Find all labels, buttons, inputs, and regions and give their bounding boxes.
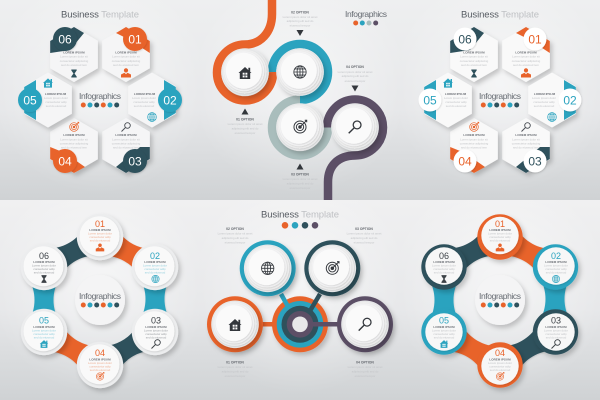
hexagon 03: Lorem ipsum dolor sit bbox=[112, 138, 140, 142]
hexagon 05: LOREM IPSUM bbox=[445, 92, 467, 96]
heading: Business Template bbox=[61, 10, 139, 20]
panel: hub and spoke with four options bbox=[200, 200, 400, 400]
panel: circle ring with white discs bbox=[0, 200, 200, 400]
node 02 bbox=[533, 244, 578, 290]
hexagon 06 bbox=[450, 27, 498, 82]
option 02 text: Lorem ipsum dolor sit amet bbox=[283, 15, 318, 19]
center label: Infographics bbox=[479, 91, 521, 101]
hexagon 03: LOREM IPSUM bbox=[115, 133, 137, 137]
option 02 text: eiusmod tempor bbox=[225, 240, 245, 244]
hexagon 06: 06 bbox=[458, 32, 472, 46]
hexagon 04: sed do eiusmod tem bbox=[61, 146, 88, 150]
option 03 text: eiusmod tempor bbox=[290, 186, 310, 190]
option 02 text bbox=[218, 227, 253, 244]
heading: Business Template bbox=[461, 10, 539, 20]
disc 03: Lorem ipsum dolor bbox=[144, 328, 168, 332]
option 04 text: 04 OPTION bbox=[356, 360, 374, 364]
disc 01 bbox=[77, 214, 123, 260]
node: home bbox=[221, 48, 269, 96]
node 04 bbox=[477, 342, 523, 388]
title and legend: Infographics bbox=[345, 9, 387, 19]
node 06: Lorem ipsum dolor bbox=[432, 264, 456, 268]
arrow: 03 bbox=[296, 164, 304, 170]
disc 01: Lorem ipsum dolor bbox=[88, 232, 112, 236]
hexagon 02: consectetur adip bbox=[533, 100, 555, 104]
node 05: sed do eiusmod bbox=[434, 336, 455, 340]
node 02: globe bbox=[240, 240, 296, 296]
hexagon 01: consectetur adipiscing bbox=[112, 59, 141, 63]
node 02: 02 bbox=[551, 251, 561, 261]
path: grey-green segment bbox=[272, 100, 328, 156]
disc 04: sed do eiusmod bbox=[90, 368, 111, 372]
hexagon 06: consectetur adipiscing bbox=[60, 59, 89, 63]
hexagon 03: Lorem ipsum dolor sit bbox=[512, 138, 540, 142]
hexagon 02: sed do eiusmod bbox=[534, 104, 555, 108]
hexagon 05 bbox=[18, 72, 72, 128]
hexagon 01: Lorem ipsum dolor sit bbox=[112, 54, 140, 58]
node 06: consectetur adip bbox=[433, 267, 455, 271]
node 05: consectetur adip bbox=[433, 332, 455, 336]
disc 06: sed do eiusmod bbox=[34, 270, 55, 274]
disc 01: 01 bbox=[95, 219, 105, 229]
option 03 text bbox=[283, 172, 318, 190]
disc 06: consectetur adip bbox=[33, 267, 55, 271]
hexagon 02: Lorem ipsum dolor bbox=[132, 96, 156, 100]
node 04: Lorem ipsum dolor bbox=[488, 361, 512, 365]
arrow: 04 bbox=[352, 86, 358, 92]
option 04 text: adipiscing elit sed do bbox=[352, 370, 379, 374]
hexagon 04: LOREM IPSUM bbox=[63, 133, 85, 137]
hexagon 02: 02 bbox=[163, 93, 177, 107]
node: target bbox=[276, 103, 324, 151]
hexagon 06: Lorem ipsum dolor sit bbox=[460, 54, 488, 58]
node: magnifier bbox=[331, 103, 379, 151]
node 03 bbox=[533, 309, 578, 355]
title and legend bbox=[345, 9, 387, 26]
hexagon 01: sed do eiusmod tem bbox=[113, 63, 140, 67]
option 04 text: eiusmod tempor bbox=[345, 79, 365, 83]
option 02 text: adipiscing elit sed do bbox=[287, 19, 314, 23]
disc 04: LOREM IPSUM bbox=[89, 358, 111, 362]
node 01 bbox=[477, 214, 523, 260]
hexagon 01: LOREM IPSUM bbox=[515, 50, 537, 54]
hexagon 05: 05 bbox=[23, 93, 37, 107]
hexagon 05: consectetur adip bbox=[445, 100, 467, 104]
hub rings and spokes bbox=[255, 294, 345, 352]
option 04 text: eiusmod tempor bbox=[355, 374, 375, 378]
option 03 text: Lorem ipsum dolor sit amet bbox=[283, 177, 318, 181]
disc 05: Lorem ipsum dolor bbox=[32, 328, 56, 332]
hexagon 02: Lorem ipsum dolor bbox=[532, 96, 556, 100]
hexagon 04: Lorem ipsum dolor sit bbox=[460, 138, 488, 142]
node 02: LOREM IPSUM bbox=[545, 260, 567, 264]
disc 02: consectetur adip bbox=[144, 267, 166, 271]
node 04: LOREM IPSUM bbox=[489, 358, 511, 362]
node 05: 05 bbox=[439, 316, 449, 326]
option 02 text: 02 OPTION bbox=[226, 227, 244, 231]
option 04 text bbox=[338, 65, 373, 83]
hexagon 06: 06 bbox=[58, 32, 72, 46]
disc 06: LOREM IPSUM bbox=[33, 260, 55, 264]
disc 03: sed do eiusmod bbox=[146, 336, 167, 340]
hexagon 01: 01 bbox=[128, 32, 142, 46]
hexagon 02: LOREM IPSUM bbox=[134, 92, 156, 96]
hexagon 02: LOREM IPSUM bbox=[534, 92, 556, 96]
hexagon 05: Lorem ipsum dolor bbox=[444, 96, 468, 100]
option 03 text: eiusmod tempor bbox=[354, 240, 374, 244]
hexagon 04 bbox=[450, 118, 498, 173]
option 01 text: Lorem ipsum dolor sit amet bbox=[228, 122, 263, 126]
node 06: sed do eiusmod bbox=[434, 270, 455, 274]
node 05: LOREM IPSUM bbox=[433, 325, 455, 329]
node: globe bbox=[276, 48, 324, 96]
option 04 text: Lorem ipsum dolor sit amet bbox=[348, 365, 383, 369]
node 03: LOREM IPSUM bbox=[545, 325, 567, 329]
node 03: 03 bbox=[551, 316, 561, 326]
disc 01: LOREM IPSUM bbox=[89, 228, 111, 232]
hexagon 04: 04 bbox=[458, 154, 472, 168]
hexagon 03: sed do eiusmod tem bbox=[513, 146, 540, 150]
option 01 text bbox=[218, 360, 253, 378]
disc 05: consectetur adip bbox=[33, 332, 55, 336]
hexagon 05: 05 bbox=[423, 93, 437, 107]
arrow: 02 bbox=[296, 30, 304, 36]
hexagon 05: sed do eiusmod bbox=[446, 104, 467, 108]
disc 05: LOREM IPSUM bbox=[33, 325, 55, 329]
connectors ring bbox=[28, 228, 170, 373]
node 03: Lorem ipsum dolor bbox=[544, 328, 568, 332]
hexagon 05 bbox=[418, 72, 472, 128]
option 04 text: 04 OPTION bbox=[346, 65, 364, 69]
hexagon 05: sed do eiusmod bbox=[46, 104, 67, 108]
hexagon 06: consectetur adipiscing bbox=[460, 59, 489, 63]
hexagon 02: 02 bbox=[563, 93, 577, 107]
node 03: consectetur adip bbox=[545, 332, 567, 336]
node 04: magnifier bbox=[337, 296, 393, 352]
disc 02 bbox=[132, 244, 178, 290]
node 02: Lorem ipsum dolor bbox=[544, 264, 568, 268]
disc 06: Lorem ipsum dolor bbox=[32, 264, 56, 268]
node 01: LOREM IPSUM bbox=[489, 228, 511, 232]
hexagon 02 bbox=[528, 72, 582, 128]
hexagon 04: consectetur adipiscing bbox=[60, 142, 89, 146]
disc 02: Lorem ipsum dolor bbox=[143, 264, 167, 268]
node 01: sed do eiusmod bbox=[490, 238, 511, 242]
hexagon 01 bbox=[102, 27, 150, 82]
disc 05: sed do eiusmod bbox=[34, 336, 55, 340]
center label bbox=[479, 91, 521, 108]
hexagon 01: Lorem ipsum dolor sit bbox=[512, 54, 540, 58]
disc 04: Lorem ipsum dolor bbox=[88, 361, 112, 365]
hexagon 04: Lorem ipsum dolor sit bbox=[60, 138, 88, 142]
option 04 text bbox=[348, 360, 383, 378]
center label: Infographics bbox=[79, 91, 121, 101]
option 02 text: adipiscing elit sed do bbox=[222, 236, 249, 240]
disc 04: consectetur adip bbox=[89, 364, 111, 368]
option 01 text: eiusmod tempor bbox=[235, 131, 255, 135]
hexagon 01: sed do eiusmod tem bbox=[513, 63, 540, 67]
hexagon 03: 03 bbox=[128, 154, 142, 168]
hexagon 04 bbox=[50, 118, 98, 173]
hexagon 03: consectetur adipiscing bbox=[512, 142, 541, 146]
option 01 text bbox=[228, 118, 263, 135]
panel: circle ring with coloured rims bbox=[400, 200, 600, 400]
path: teal segment bbox=[272, 44, 328, 100]
disc 04 bbox=[77, 342, 123, 388]
option 02 text bbox=[283, 10, 318, 28]
node 04: consectetur adip bbox=[489, 364, 511, 368]
disc 03: 03 bbox=[151, 316, 161, 326]
disc 06: 06 bbox=[39, 251, 49, 261]
node 03: target bbox=[304, 240, 360, 296]
disc 03 bbox=[132, 309, 178, 355]
hexagon 05: Lorem ipsum dolor bbox=[44, 96, 68, 100]
center circle bbox=[475, 275, 525, 325]
hexagon 02 bbox=[128, 72, 182, 128]
connectors ring bbox=[428, 228, 570, 373]
disc 02: LOREM IPSUM bbox=[144, 260, 166, 264]
panel: hexagon infographic, white badges bbox=[400, 0, 600, 200]
option 01 text: Lorem ipsum dolor sit amet bbox=[218, 365, 253, 369]
node 03: sed do eiusmod bbox=[546, 336, 567, 340]
panel: winding path with four options bbox=[200, 0, 400, 200]
hexagon 01: LOREM IPSUM bbox=[115, 50, 137, 54]
disc 02: sed do eiusmod bbox=[145, 270, 166, 274]
node 06 bbox=[421, 244, 467, 290]
option 02 text: 02 OPTION bbox=[291, 10, 309, 14]
hexagon 03 bbox=[102, 118, 150, 173]
hexagon 06: Lorem ipsum dolor sit bbox=[60, 54, 88, 58]
hexagon 03 bbox=[502, 118, 550, 173]
disc 02: 02 bbox=[150, 251, 160, 261]
hexagon 03: LOREM IPSUM bbox=[515, 133, 537, 137]
node 01: Lorem ipsum dolor bbox=[488, 232, 512, 236]
hexagon 04: consectetur adipiscing bbox=[460, 142, 489, 146]
option 03 text: adipiscing elit sed do bbox=[287, 182, 314, 186]
hexagon 04: 04 bbox=[58, 154, 72, 168]
path: orange segment bbox=[217, 0, 273, 101]
option 01 text: adipiscing elit sed do bbox=[222, 370, 249, 374]
hexagon 02: sed do eiusmod bbox=[134, 104, 155, 108]
hexagon 06 bbox=[50, 27, 98, 82]
option 04 text: adipiscing elit sed do bbox=[342, 74, 369, 78]
center circle bbox=[75, 275, 125, 325]
disc 04: 04 bbox=[95, 348, 105, 358]
option 01 text: 01 OPTION bbox=[236, 118, 254, 122]
option 03 text: adipiscing elit sed do bbox=[351, 236, 378, 240]
option 04 text: Lorem ipsum dolor sit amet bbox=[338, 70, 373, 74]
node 06: LOREM IPSUM bbox=[433, 260, 455, 264]
option 01 text: 01 OPTION bbox=[226, 360, 244, 364]
disc 03: consectetur adip bbox=[145, 332, 167, 336]
hexagon 06: sed do eiusmod tem bbox=[61, 63, 88, 67]
path: purple segment bbox=[327, 100, 383, 200]
disc 05 bbox=[21, 309, 67, 355]
option 02 text: eiusmod tempor bbox=[290, 24, 310, 28]
node 05 bbox=[421, 309, 467, 355]
legend dots bbox=[282, 222, 318, 229]
node 05: Lorem ipsum dolor bbox=[432, 328, 456, 332]
hexagon 06: LOREM IPSUM bbox=[63, 50, 85, 54]
node 06: 06 bbox=[439, 251, 449, 261]
option 01 text: eiusmod tempor bbox=[225, 374, 245, 378]
option 02 text: Lorem ipsum dolor sit amet bbox=[218, 232, 253, 236]
option 03 text: 03 OPTION bbox=[355, 227, 373, 231]
hexagon 05: LOREM IPSUM bbox=[45, 92, 67, 96]
hexagon 01: consectetur adipiscing bbox=[512, 59, 541, 63]
node 02: consectetur adip bbox=[545, 267, 567, 271]
hexagon 01: 01 bbox=[528, 32, 542, 46]
node 02: sed do eiusmod bbox=[546, 270, 567, 274]
hexagon 05: consectetur adip bbox=[45, 100, 67, 104]
disc 03: LOREM IPSUM bbox=[145, 325, 167, 329]
node 01: 01 bbox=[495, 219, 505, 229]
hexagon 03: consectetur adipiscing bbox=[112, 142, 141, 146]
hexagon 03: sed do eiusmod tem bbox=[113, 146, 140, 150]
option 03 text: Lorem ipsum dolor sit amet bbox=[347, 232, 382, 236]
disc 06 bbox=[21, 244, 67, 290]
disc 05: 05 bbox=[39, 316, 49, 326]
node 04: 04 bbox=[495, 348, 505, 358]
center circle: Infographics bbox=[479, 291, 521, 301]
node 04: sed do eiusmod bbox=[490, 368, 511, 372]
disc 01: sed do eiusmod bbox=[90, 238, 111, 242]
hexagon 03: 03 bbox=[528, 154, 542, 168]
hexagon 04: LOREM IPSUM bbox=[463, 133, 485, 137]
option 01 text: adipiscing elit sed do bbox=[232, 126, 259, 130]
hexagon 02: consectetur adip bbox=[133, 100, 155, 104]
node 01: consectetur adip bbox=[489, 235, 511, 239]
disc 01: consectetur adip bbox=[89, 235, 111, 239]
hexagon 01 bbox=[502, 27, 550, 82]
hexagon 04: sed do eiusmod tem bbox=[461, 146, 488, 150]
heading: Business Template bbox=[261, 210, 339, 220]
option 03 text bbox=[347, 227, 382, 244]
hexagon 06: sed do eiusmod tem bbox=[461, 63, 488, 67]
center label bbox=[79, 91, 121, 108]
center circle: Infographics bbox=[79, 291, 121, 301]
panel: hexagon infographic, dark bands bbox=[0, 0, 200, 200]
option 03 text: 03 OPTION bbox=[291, 172, 309, 176]
hexagon 06: LOREM IPSUM bbox=[463, 50, 485, 54]
node 01: home bbox=[207, 296, 263, 352]
arrow: 01 bbox=[242, 108, 248, 114]
